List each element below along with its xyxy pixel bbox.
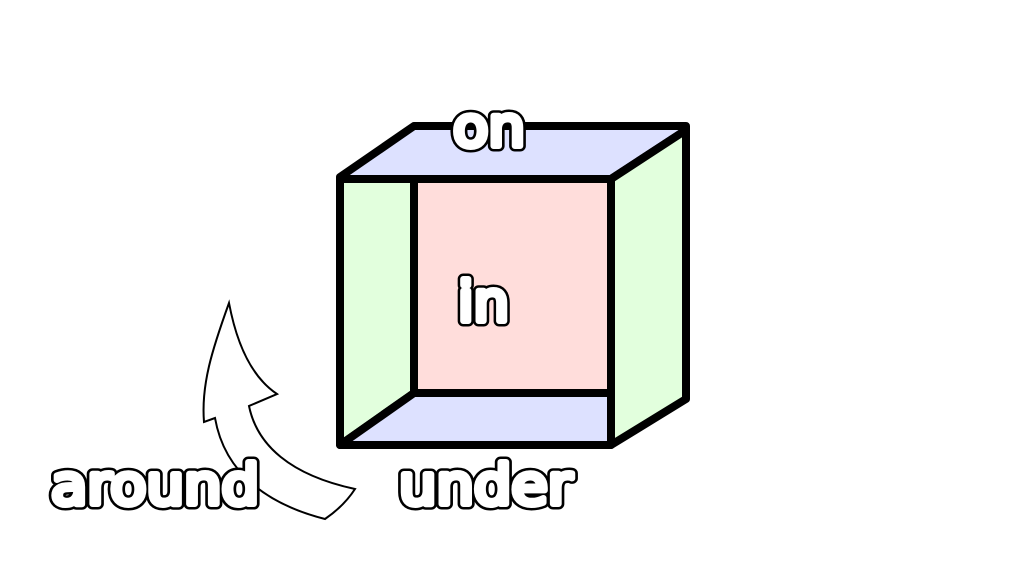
box: cube with coloured faces [340,126,686,445]
label: on: on [453,95,525,159]
label: in: in [458,270,509,334]
face: left [340,179,414,445]
arrow: curved arrow going around the box [204,303,355,519]
face: back [414,179,611,393]
face: right [611,130,686,445]
label: in: in [458,270,509,334]
label: around: around [51,453,259,517]
face: bottom [340,393,611,445]
face: top [340,126,686,179]
label: under: under [399,453,572,517]
label: on: on [453,95,525,159]
label: around: around [51,453,259,517]
label: under: under [399,453,572,517]
